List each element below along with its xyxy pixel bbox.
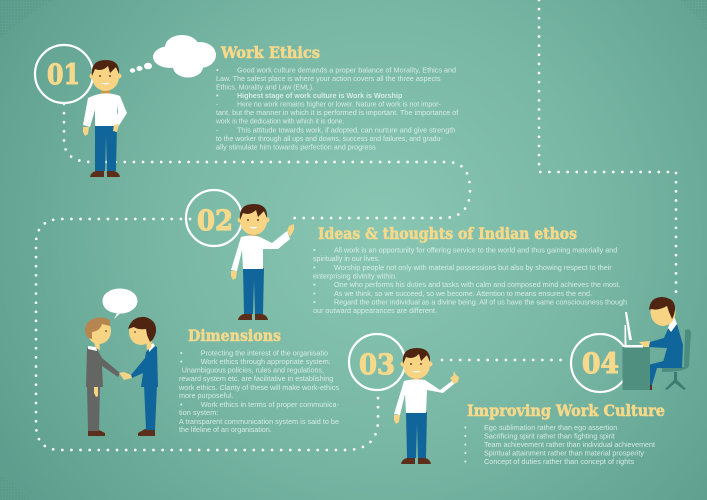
body text: reward system etc. are facilitative in establishing	[179, 374, 333, 383]
body text: •	[313, 263, 316, 272]
icon: thought cloud	[130, 35, 216, 78]
body text: to the worker through all ups and downs, success and failures, and gradu-	[216, 134, 443, 143]
body text: work ethics. Clarity of these will make work-ethics	[178, 383, 339, 392]
body text: •	[464, 432, 467, 440]
body text: Good work culture demands a proper balance of Morality, Ethics and	[237, 66, 456, 74]
body text: the lifeline of an organisation.	[179, 425, 272, 434]
body text: •	[180, 400, 183, 409]
body text: Work ethics in terms of proper communica-	[201, 400, 339, 409]
body text: •	[180, 348, 183, 358]
body text: enterprising divinity within.	[313, 272, 397, 280]
body text: Sacrificing spirit rather than fighting spirit	[484, 432, 616, 440]
body text: •	[464, 440, 467, 449]
body text: Concept of duties rather than concept of rights	[484, 457, 634, 466]
body text: Regard the other individual as a divine being. All of us have the same consciousness though	[334, 298, 627, 306]
character: two men shaking hands	[85, 288, 158, 436]
body text: work is the dedication with which it is done.	[215, 116, 344, 126]
body text: Worship people not only with material possessions but also by showing respect to their	[334, 263, 612, 272]
body text	[313, 246, 627, 315]
body text: •	[313, 246, 316, 254]
body text: our outward appearances are different.	[313, 306, 437, 315]
character: man beside 01	[83, 60, 127, 177]
body text: Law. The safest place is where your action covers all the three aspects	[216, 74, 441, 83]
body text: •	[216, 66, 219, 74]
icon: speech bubble	[102, 288, 138, 319]
character: man at desk with computer	[622, 297, 691, 390]
icon: desk	[622, 347, 650, 390]
body text: •	[180, 357, 183, 366]
body text: Ego sublimation rather than ego assertion	[484, 423, 617, 432]
body text: •	[313, 280, 316, 289]
body text: more purposeful.	[179, 391, 233, 400]
body text: Ethics, Morality and Law (EML).	[216, 82, 314, 92]
number badge 03: 03	[359, 348, 395, 381]
number badge 02	[186, 190, 242, 246]
number badge 03	[349, 334, 405, 390]
body text: Work ethics through appropriate system:	[201, 357, 331, 366]
body text: Here no work remains higher or lower. Nature of work is not impor-	[237, 100, 441, 108]
body text: Spiritual attainment rather than material prosperity	[484, 448, 644, 458]
body text	[464, 423, 656, 466]
panel: Ideas and thoughts text	[313, 224, 627, 315]
panel: Work Ethics text	[215, 43, 459, 152]
body text: •	[313, 298, 316, 306]
body text: Team achievement rather than individual achievement	[484, 440, 656, 449]
body text: tion system:	[179, 408, 218, 417]
heading: Improving Work Culture	[467, 401, 665, 420]
body text: Highest stage of work culture is Work is Worship	[237, 91, 403, 100]
icon: chair	[662, 329, 691, 390]
body text: •	[216, 91, 219, 100]
number badge 04: 04	[582, 347, 619, 380]
body text: As we think, so we succeed, so we become. Attention to means ensures the end.	[334, 289, 592, 298]
number badge 01	[35, 45, 93, 103]
body text	[215, 66, 459, 152]
heading: Work Ethics	[220, 43, 320, 62]
number badge 04	[571, 334, 629, 392]
body text: This attitude towards work, if adopted, can nurture and give strength	[237, 126, 455, 134]
body text: All work is an opportunity for offering service to the world and thus gaining materially and	[334, 246, 617, 254]
body text: One who performs his duties and tasks with calm and composed mind achieves the most.	[334, 280, 621, 289]
character: man thumbs-up beside 03	[394, 348, 459, 464]
body text	[178, 348, 339, 434]
body text: spiritually in our lives.	[313, 254, 380, 263]
heading: Ideas & thoughts of Indian ethos	[318, 224, 577, 243]
character: man waving beside 02	[231, 204, 294, 320]
number badge 02: 02	[197, 204, 233, 237]
body text: -	[216, 126, 219, 134]
body text: tant, but the manner in which it is performed is important. The importance of	[216, 108, 459, 117]
panel: Improving Work Culture text	[464, 401, 665, 466]
body text: •	[464, 457, 467, 466]
body text: -	[216, 100, 219, 108]
body text: •	[464, 423, 467, 432]
body text: Protecting the interest of the organisatio	[201, 348, 328, 358]
number badge 01: 01	[47, 58, 80, 91]
icon: monitor	[624, 312, 643, 348]
body text: •	[313, 289, 316, 298]
body text: •	[464, 448, 467, 458]
heading: Dimensions	[188, 326, 281, 345]
panel: Dimensions text	[178, 326, 339, 434]
body text: Unambiguous policies, rules and regulations,	[182, 366, 324, 374]
body text: ally stimulate him towards perfection and progress	[216, 142, 376, 152]
body text: A transparent communication system is said to be	[179, 417, 339, 426]
